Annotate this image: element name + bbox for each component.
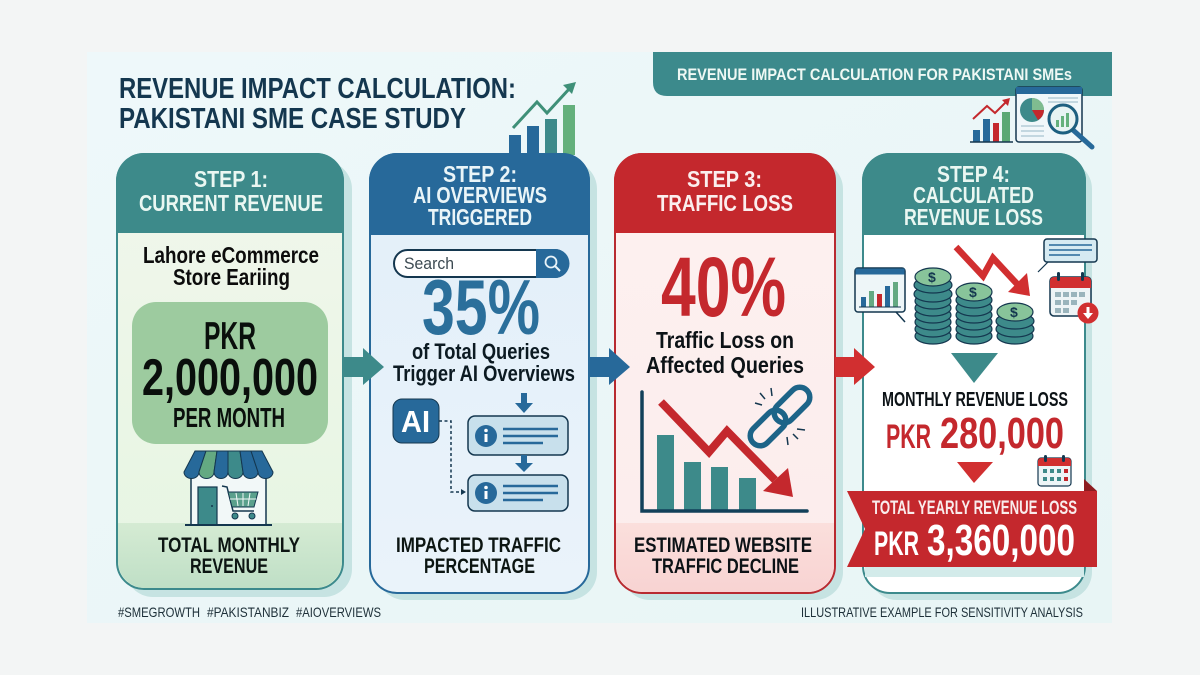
store description: Lahore eCommerce [143, 242, 319, 268]
step 1 header [116, 153, 344, 233]
search bar: Search [404, 254, 454, 273]
store description [143, 242, 319, 290]
icon: AI to overview flow [393, 393, 568, 511]
arrow: red down triangle [957, 462, 993, 483]
revenue figure box: 2,000,000 [142, 349, 318, 407]
step 4 header: STEP 4: [937, 161, 1010, 187]
footer hashtags: #AIOVERVIEWS [296, 604, 381, 620]
step 2 footer label: PERCENTAGE [424, 555, 535, 578]
top banner: REVENUE IMPACT CALCULATION FOR PAKISTANI SMEs [677, 65, 1072, 84]
big stat 35%: 35% [422, 263, 540, 351]
big stat 40%: 40% [661, 240, 786, 334]
step 3 footer label: TRAFFIC DECLINE [652, 555, 799, 578]
monthly loss label: MONTHLY REVENUE LOSS [882, 389, 1068, 411]
title: PAKISTANI SME CASE STUDY [119, 103, 466, 135]
stat description: Traffic Loss on [656, 327, 794, 353]
icon: calendar with down badge [1050, 272, 1098, 324]
icon: analytics report and magnifier [970, 87, 1092, 147]
icon: growth bar chart [509, 82, 576, 155]
panel: step 4 calculated revenue loss [847, 153, 1098, 600]
title: REVENUE IMPACT CALCULATION: [119, 73, 516, 105]
icon: AI to overview flow: AI [401, 404, 430, 439]
step 1 header: CURRENT REVENUE [139, 190, 323, 216]
icon: coin stacks: $ [969, 284, 977, 300]
step 1 footer label: TOTAL MONTHLY [158, 534, 300, 557]
step 1 footer label [158, 534, 300, 578]
stat description [646, 327, 804, 378]
title [119, 73, 516, 135]
arrow: falling revenue [956, 247, 1030, 296]
stat description: of Total Queries [412, 339, 550, 364]
ribbon: total yearly revenue loss: 3,360,000 [927, 516, 1075, 565]
top banner [653, 52, 1112, 96]
arrow: step 2 to step 3 [589, 348, 630, 385]
step 3 header [614, 153, 835, 233]
icon: coin stacks [914, 268, 1034, 344]
panel: step 3 traffic loss [614, 153, 843, 600]
store description: Store Eariing [173, 264, 290, 290]
step 4 header: REVENUE LOSS [904, 204, 1043, 230]
monthly loss value: PKR [886, 418, 931, 456]
step 2 header [369, 153, 590, 235]
ribbon: total yearly revenue loss [847, 479, 1097, 577]
step 1 bottom band [118, 523, 342, 588]
page background [87, 52, 1112, 623]
revenue figure box: PER MONTH [173, 402, 285, 433]
icon: coin stacks: $ [928, 269, 936, 285]
arrow: step 3 to step 4 [835, 348, 875, 385]
step 3 footer label [634, 534, 812, 578]
step 3 header: TRAFFIC LOSS [657, 190, 793, 216]
footer hashtags: #PAKISTANBIZ [207, 604, 289, 620]
revenue figure box [132, 302, 328, 444]
monthly loss value: 280,000 [940, 409, 1064, 458]
panel: step 1 current revenue [116, 153, 352, 597]
search bar [394, 249, 570, 278]
step 3 bottom band [616, 523, 834, 592]
icon: speech bubble [1038, 239, 1097, 272]
icon: small calendar [1038, 455, 1071, 486]
step 4 header: CALCULATED [913, 182, 1034, 208]
footer hashtags [118, 604, 381, 620]
step 2 header: AI OVERVIEWS [413, 182, 547, 208]
icon: broken chain link [746, 383, 814, 450]
footer hashtags: #SMEGROWTH [118, 604, 200, 620]
arrow: step 1 to step 2 [343, 348, 384, 385]
ribbon: total yearly revenue loss: PKR [874, 525, 919, 563]
revenue figure box: PKR [204, 315, 256, 358]
arrow: teal down triangle [951, 353, 998, 383]
monthly loss value [886, 409, 1064, 458]
stat description [393, 339, 575, 386]
step 3 header: STEP 3: [687, 166, 762, 192]
step 2 footer label [396, 534, 561, 578]
step 4 header [862, 153, 1086, 235]
stat description: Affected Queries [646, 352, 804, 378]
step 2 header: STEP 2: [443, 161, 517, 187]
footer disclaimer: ILLUSTRATIVE EXAMPLE FOR SENSITIVITY ANALYSIS [801, 604, 1083, 620]
step 2 footer label: IMPACTED TRAFFIC [396, 534, 561, 557]
stat description: Trigger AI Overviews [393, 361, 575, 386]
step 1 header: STEP 1: [194, 166, 268, 192]
icon: chart window [855, 268, 905, 322]
chart: declining traffic bars [642, 392, 807, 511]
panel: step 2 AI overviews triggered [369, 153, 597, 600]
icon: coin stacks: $ [1010, 304, 1018, 320]
icon: storefront with cart [184, 451, 273, 525]
step 2 header: TRIGGERED [428, 204, 532, 230]
step 1 footer label: REVENUE [190, 555, 268, 578]
step 3 footer label: ESTIMATED WEBSITE [634, 534, 812, 557]
ribbon: total yearly revenue loss: TOTAL YEARLY REVENUE LOSS [872, 498, 1077, 519]
